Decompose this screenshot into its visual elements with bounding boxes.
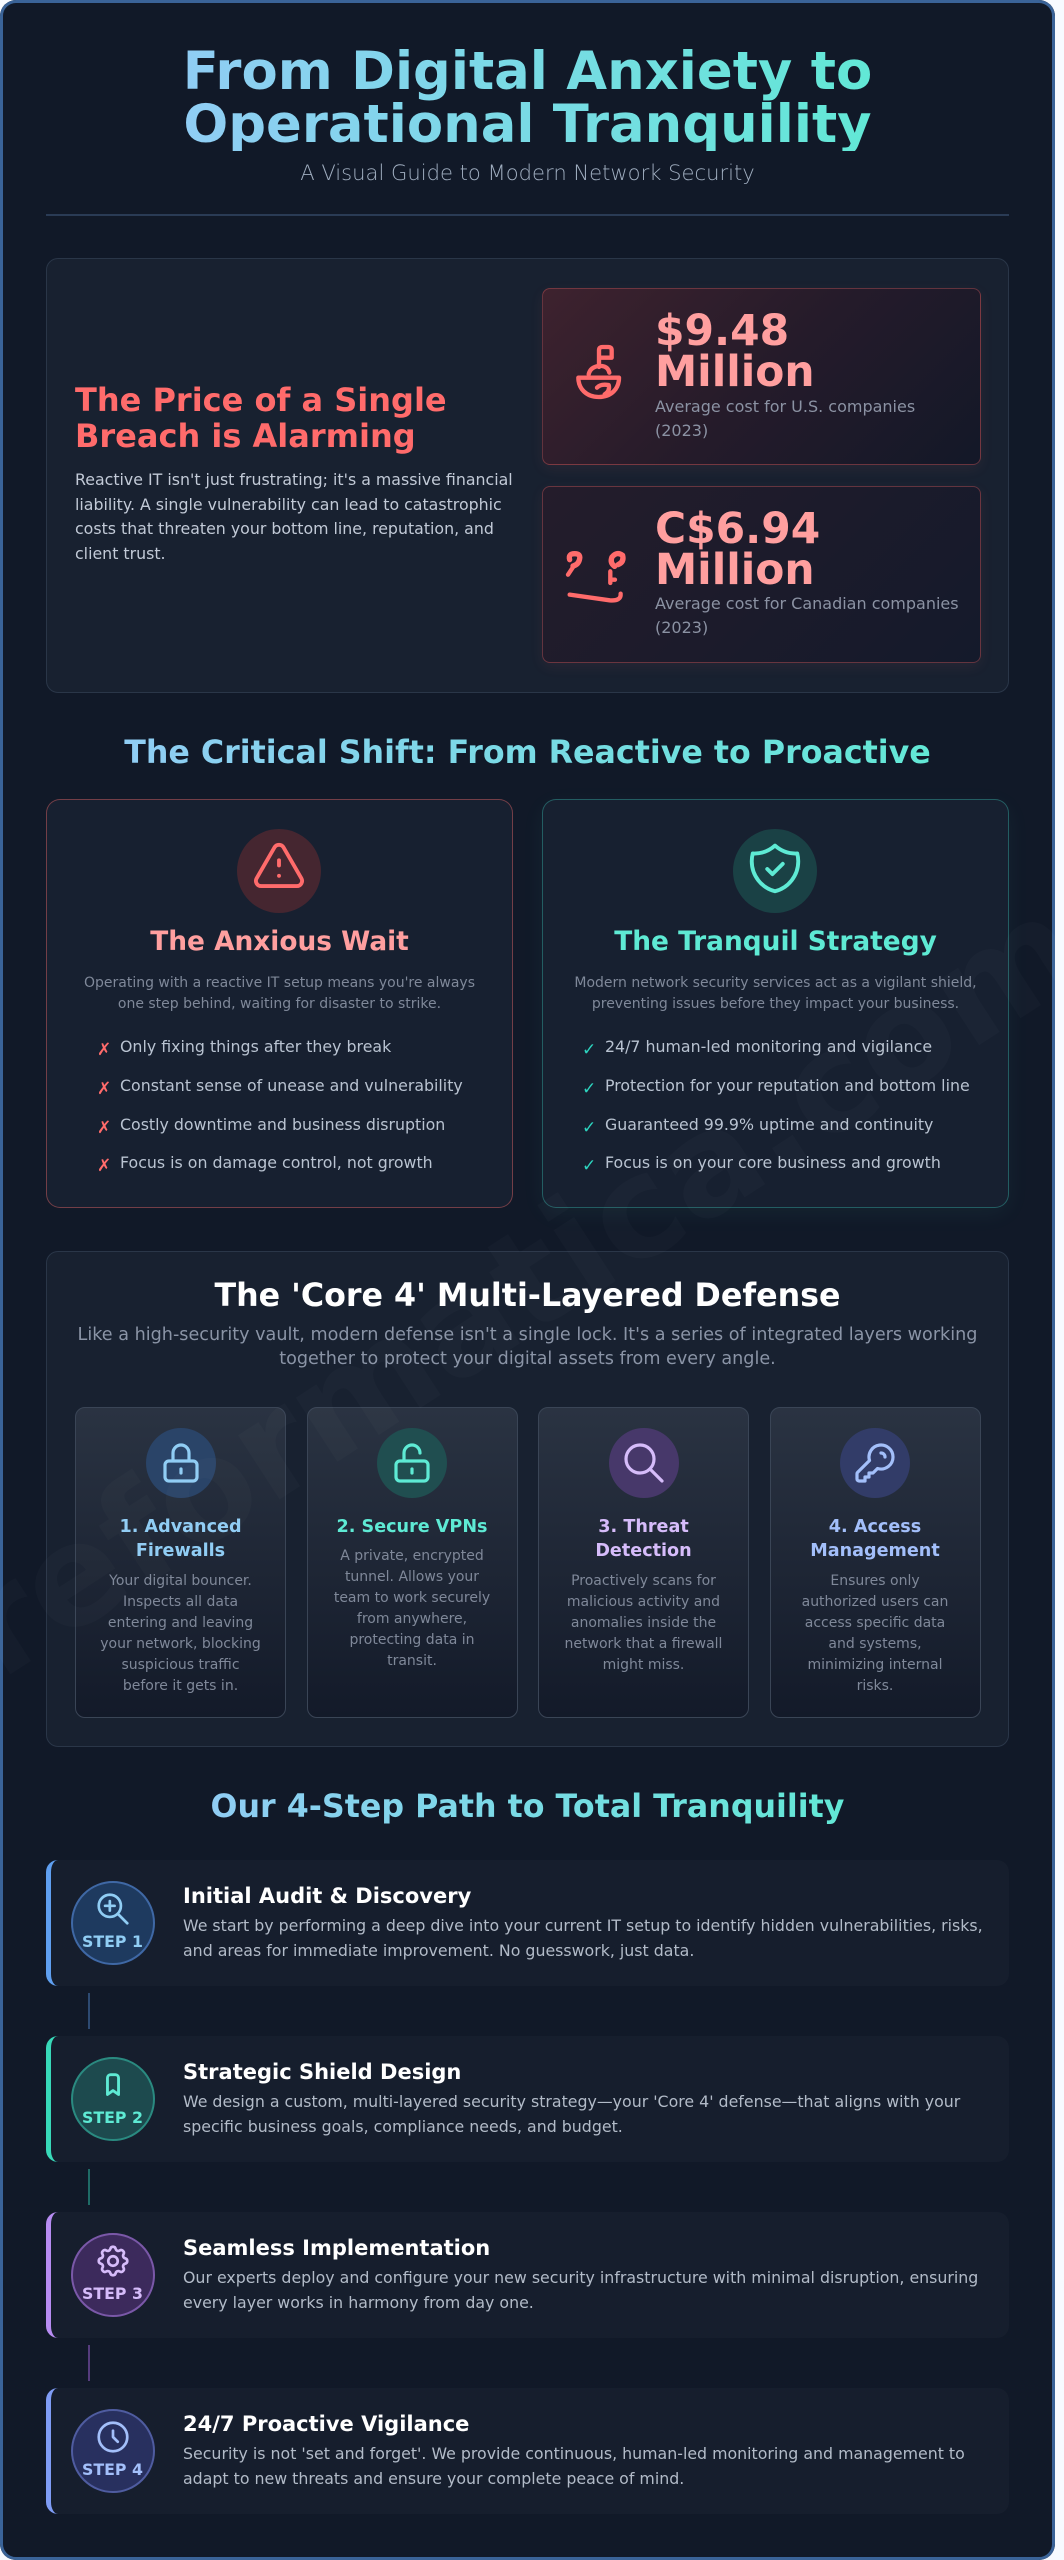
heading: 4-step path: Our 4-Step Path to Total Tranquility <box>211 1789 844 1825</box>
card text: Proactively scans for <box>571 1573 716 1589</box>
stat value: Million <box>655 347 815 396</box>
card text: access specific data <box>805 1615 945 1631</box>
list: proactive benefits <box>582 1037 970 1176</box>
panel: tranquil strategy: ✓ <box>582 1040 596 1060</box>
step text <box>183 1916 983 1960</box>
badge: step 1: STEP 1 <box>82 1932 143 1951</box>
card title: Firewalls <box>136 1541 225 1561</box>
stat value: C$6.94 <box>655 504 820 553</box>
text: tranquil description: Modern network security services act as a vigilant shield, <box>574 975 977 991</box>
heading: critical shift: The Critical Shift: From Reactive to Proactive <box>124 735 931 771</box>
list: reactive problems: Focus is on damage control, not growth <box>120 1153 433 1172</box>
card text: might miss. <box>603 1657 684 1673</box>
icon: warning <box>237 829 321 913</box>
text: anxious description: one step behind, waiting for disaster to strike. <box>118 996 441 1012</box>
card text: Inspects all data <box>123 1594 238 1610</box>
panel: anxious wait: ✗ <box>97 1040 111 1060</box>
badge: step 2: STEP 2 <box>82 2108 143 2127</box>
card text: tunnel. Allows your <box>345 1569 479 1585</box>
card: threat detection <box>538 1407 749 1718</box>
stat card: US cost <box>542 288 981 465</box>
card text <box>334 1548 490 1669</box>
text: core 4 intro <box>78 1325 977 1369</box>
step text: and areas for immediate improvement. No guesswork, just data. <box>183 1941 694 1960</box>
icon: broken chart <box>566 550 626 603</box>
title: From Digital Anxiety to <box>183 41 872 102</box>
text: anxious description: Operating with a reactive IT setup means you're always <box>84 975 475 991</box>
stat label: Average cost for U.S. companies <box>655 397 915 416</box>
icon: key <box>840 1428 910 1498</box>
card text: team to work securely <box>334 1590 490 1606</box>
stat label <box>655 397 915 440</box>
stat label <box>655 594 959 637</box>
card text <box>802 1573 948 1694</box>
text: core 4 intro: together to protect your digital assets from every angle. <box>279 1349 776 1369</box>
step 4 <box>46 2388 1009 2514</box>
panel: tranquil strategy: ✓ <box>582 1118 596 1138</box>
stat value: $9.48 <box>655 306 789 355</box>
card title: Detection <box>595 1541 692 1561</box>
card text: transit. <box>387 1653 437 1669</box>
subtitle: A Visual Guide to Modern Network Security <box>300 160 755 184</box>
step text: every layer works in harmony from day one. <box>183 2293 534 2312</box>
card text: risks. <box>857 1678 893 1694</box>
step text: We start by performing a deep dive into your current IT setup to identify hidden vulnerabilities, risks, <box>183 1916 983 1935</box>
heading: core 4: The 'Core 4' Multi-Layered Defense <box>214 1278 841 1314</box>
card title <box>119 1517 242 1561</box>
list: reactive problems <box>97 1037 463 1176</box>
step text <box>183 2444 965 2488</box>
card text: suspicious traffic <box>121 1657 240 1673</box>
panel: tranquil strategy: ✓ <box>582 1156 596 1176</box>
heading: price of a single breach: Breach is Alarming <box>75 416 416 454</box>
step title: Initial Audit & Discovery <box>183 1884 471 1908</box>
stat label: Average cost for Canadian companies <box>655 594 959 613</box>
list: reactive problems: Constant sense of unease and vulnerability <box>120 1076 463 1095</box>
card title: 1. Advanced <box>119 1517 242 1537</box>
badge: step 2 <box>70 2057 154 2141</box>
step text: adapt to new threats and ensure your complete peace of mind. <box>183 2469 684 2488</box>
step 3 <box>46 2212 1009 2338</box>
badge: step 1 <box>70 1881 154 1965</box>
list: proactive benefits: Guaranteed 99.9% uptime and continuity <box>605 1115 933 1134</box>
text: reactive IT liability: liability. A single vulnerability can lead to catastrophic <box>75 495 502 514</box>
card text: entering and leaving <box>108 1615 253 1631</box>
card: access management <box>770 1407 980 1718</box>
icon: money bowl <box>576 344 622 400</box>
step title: 24/7 Proactive Vigilance <box>183 2412 469 2436</box>
card text <box>565 1573 722 1673</box>
panel: anxious wait: ✗ <box>97 1079 111 1099</box>
badge: step 4 <box>70 2409 154 2493</box>
card text: and systems, <box>828 1636 922 1652</box>
panel: anxious wait: ✗ <box>97 1118 111 1138</box>
text: anxious description <box>84 975 475 1012</box>
list: proactive benefits: Focus is on your core business and growth <box>605 1153 941 1172</box>
text: reactive IT liability: Reactive IT isn't just frustrating; it's a massive financial <box>75 470 513 489</box>
card text: authorized users can <box>802 1594 948 1610</box>
card title: 3. Threat <box>598 1517 689 1537</box>
card title <box>810 1517 940 1561</box>
card text: from anywhere, <box>357 1611 467 1627</box>
panel: tranquil strategy <box>542 799 1009 1208</box>
stat card: Canada cost <box>542 486 981 663</box>
step text <box>183 2092 960 2136</box>
step text: Security is not 'set and forget'. We provide continuous, human-led monitoring and management to <box>183 2444 965 2463</box>
card title <box>595 1517 692 1561</box>
panel: tranquil strategy: ✓ <box>582 1079 596 1099</box>
card text: anomalies inside the <box>571 1615 716 1631</box>
title <box>183 41 872 155</box>
step text: specific business goals, compliance needs, and budget. <box>183 2117 623 2136</box>
card text: A private, encrypted <box>340 1548 484 1564</box>
text: reactive IT liability: client trust. <box>75 544 166 563</box>
step title: Strategic Shield Design <box>183 2060 461 2084</box>
card text: minimizing internal <box>808 1657 942 1673</box>
stat value <box>655 306 815 396</box>
text: reactive IT liability <box>75 470 513 563</box>
card: secure VPNs <box>306 1407 518 1718</box>
heading: price of a single breach: The Price of a Single <box>75 381 447 419</box>
card text <box>100 1573 261 1694</box>
card text: protecting data in <box>349 1632 475 1648</box>
card title: 4. Access <box>829 1517 921 1537</box>
list: reactive problems: Only fixing things after they break <box>120 1037 391 1056</box>
card title: Management <box>810 1541 940 1561</box>
card text: Ensures only <box>830 1573 920 1589</box>
text: reactive IT liability: costs that threaten your bottom line, reputation, and <box>75 519 494 538</box>
card text: network that a firewall <box>565 1636 722 1652</box>
icon: open lock <box>377 1428 447 1498</box>
stat value <box>655 504 820 594</box>
text: tranquil description <box>574 975 977 1012</box>
heading: tranquil strategy: The Tranquil Strategy <box>614 926 937 957</box>
panel: anxious wait: ✗ <box>97 1156 111 1176</box>
step 2 <box>46 2036 1009 2162</box>
text: core 4 intro: Like a high-security vault, modern defense isn't a single lock. It's a series of integrated layers working <box>78 1325 977 1345</box>
list: proactive benefits: 24/7 human-led monitoring and vigilance <box>605 1037 932 1056</box>
card title: 2. Secure VPNs <box>336 1517 488 1537</box>
step text: We design a custom, multi-layered security strategy—your 'Core 4' defense—that aligns with your <box>183 2092 960 2111</box>
step text: Our experts deploy and configure your new security infrastructure with minimal disruption, ensuring <box>183 2268 978 2287</box>
panel: price of a breach <box>46 258 1009 693</box>
stat value: Million <box>655 545 815 594</box>
step text <box>183 2268 978 2312</box>
step 1 <box>46 1860 1009 1986</box>
icon: shield check <box>733 829 817 913</box>
stat label: (2023) <box>655 618 708 637</box>
card: advanced firewalls <box>75 1407 286 1718</box>
card text: before it gets in. <box>123 1678 238 1694</box>
panel: core 4 defense <box>46 1251 1009 1747</box>
title: Operational Tranquility <box>183 94 872 155</box>
card text: your network, blocking <box>100 1636 261 1652</box>
badge: step 4: STEP 4 <box>82 2460 143 2479</box>
stat label: (2023) <box>655 421 708 440</box>
heading: price of a single breach <box>75 381 447 454</box>
step title: Seamless Implementation <box>183 2236 490 2260</box>
badge: step 3 <box>70 2233 154 2317</box>
text: tranquil description: preventing issues before they impact your business. <box>592 996 959 1012</box>
icon: closed lock <box>146 1428 216 1498</box>
panel: anxious wait <box>46 799 513 1208</box>
card text: Your digital bouncer. <box>109 1573 252 1589</box>
card text: malicious activity and <box>567 1594 720 1610</box>
icon: magnifier <box>608 1428 678 1498</box>
list: proactive benefits: Protection for your reputation and bottom line <box>605 1076 970 1095</box>
heading: anxious wait: The Anxious Wait <box>150 926 409 957</box>
list: reactive problems: Costly downtime and business disruption <box>120 1115 445 1134</box>
badge: step 3: STEP 3 <box>82 2284 143 2303</box>
